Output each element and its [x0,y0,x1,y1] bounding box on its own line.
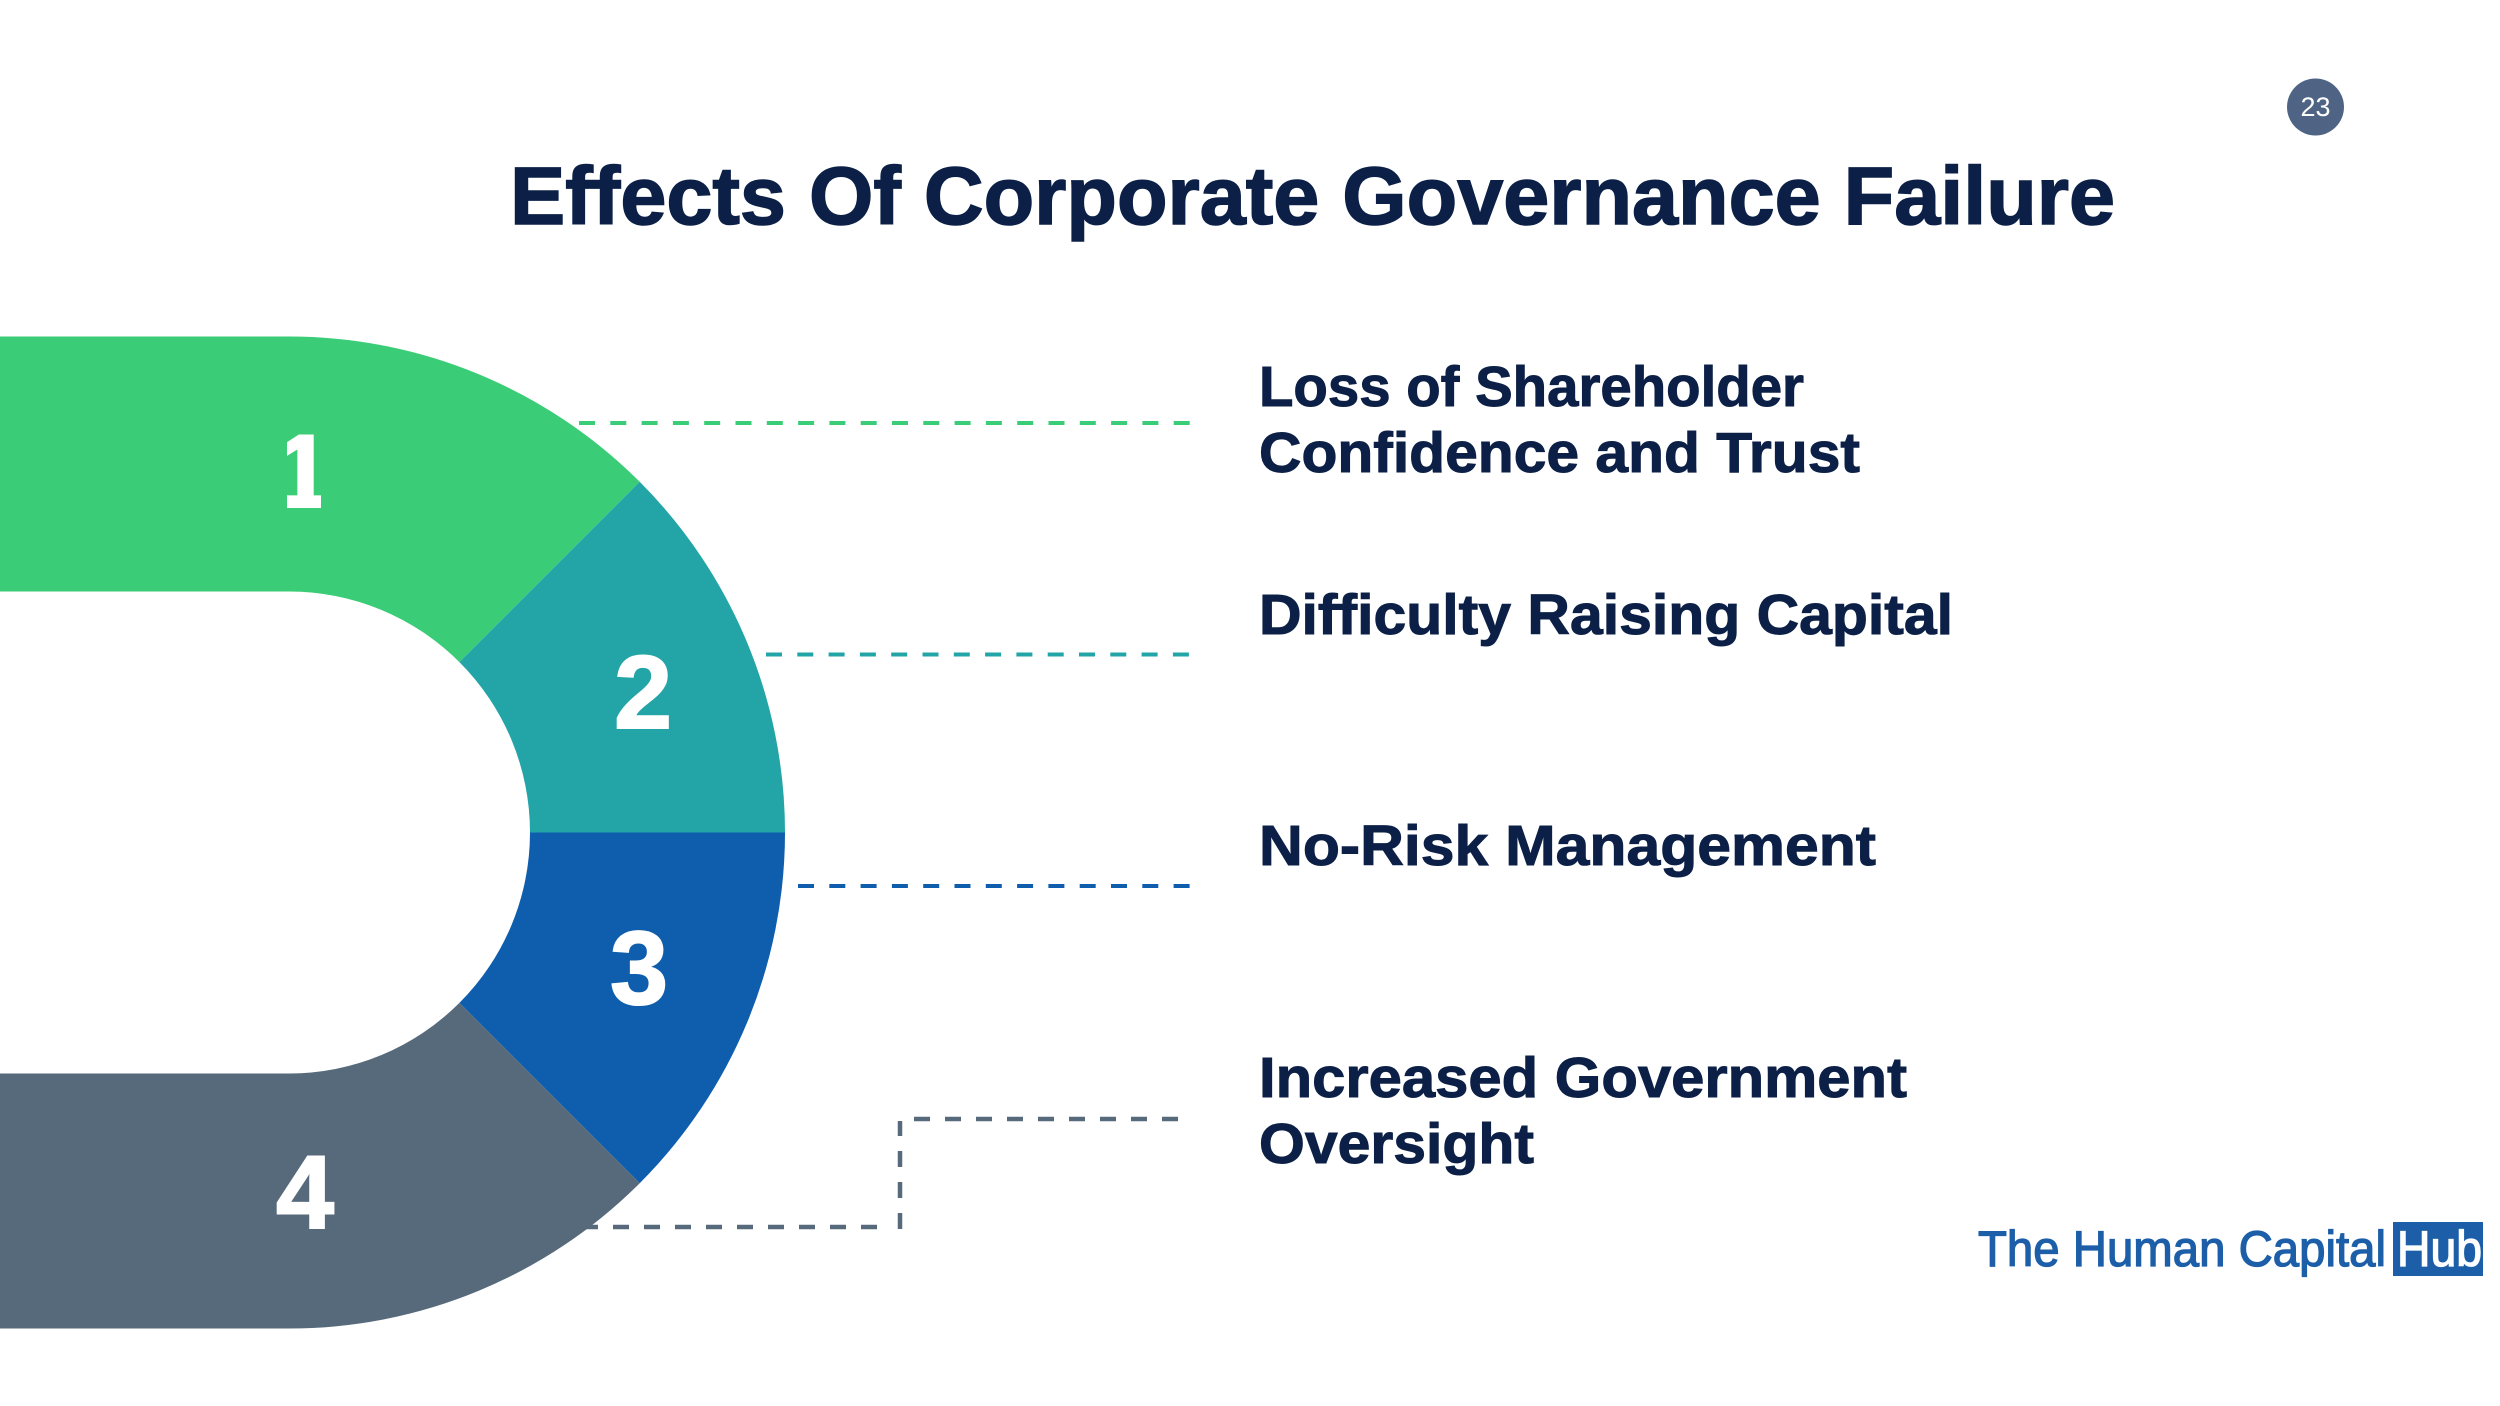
logo: Hub [2397,1221,2482,1277]
connector 2 [766,652,1190,656]
logo: The Human Capital [1978,1221,2386,1277]
segment 2 [459,482,785,832]
segment 4 [0,1003,640,1328]
page number badge: 23 [2300,92,2331,122]
page number badge [2287,78,2344,136]
connector 1 [579,421,1190,425]
item 2 text: Difficulty Raising Capital [1259,583,1953,647]
segment 1: 1 [274,414,332,530]
item 4 text: Increased Government [1259,1046,1907,1110]
segment 3: 3 [610,911,668,1027]
item 1 text: Loss of Shareholder [1259,355,1804,419]
connector 4 [582,1119,1184,1229]
segment 3 [459,832,785,1183]
title: Effects Of Corporate Governance Failure [510,151,2115,242]
connector 3 [798,884,1190,888]
segment 4: 4 [276,1135,334,1251]
u-shaped segmented diagram [0,336,785,1328]
segment 1 [0,336,640,662]
item 4 text: Oversight [1259,1112,1534,1176]
segment 2: 2 [614,635,672,751]
item 1 text: Confidence and Trust [1259,421,1860,485]
item 3 text: No-Risk Management [1259,814,1876,878]
